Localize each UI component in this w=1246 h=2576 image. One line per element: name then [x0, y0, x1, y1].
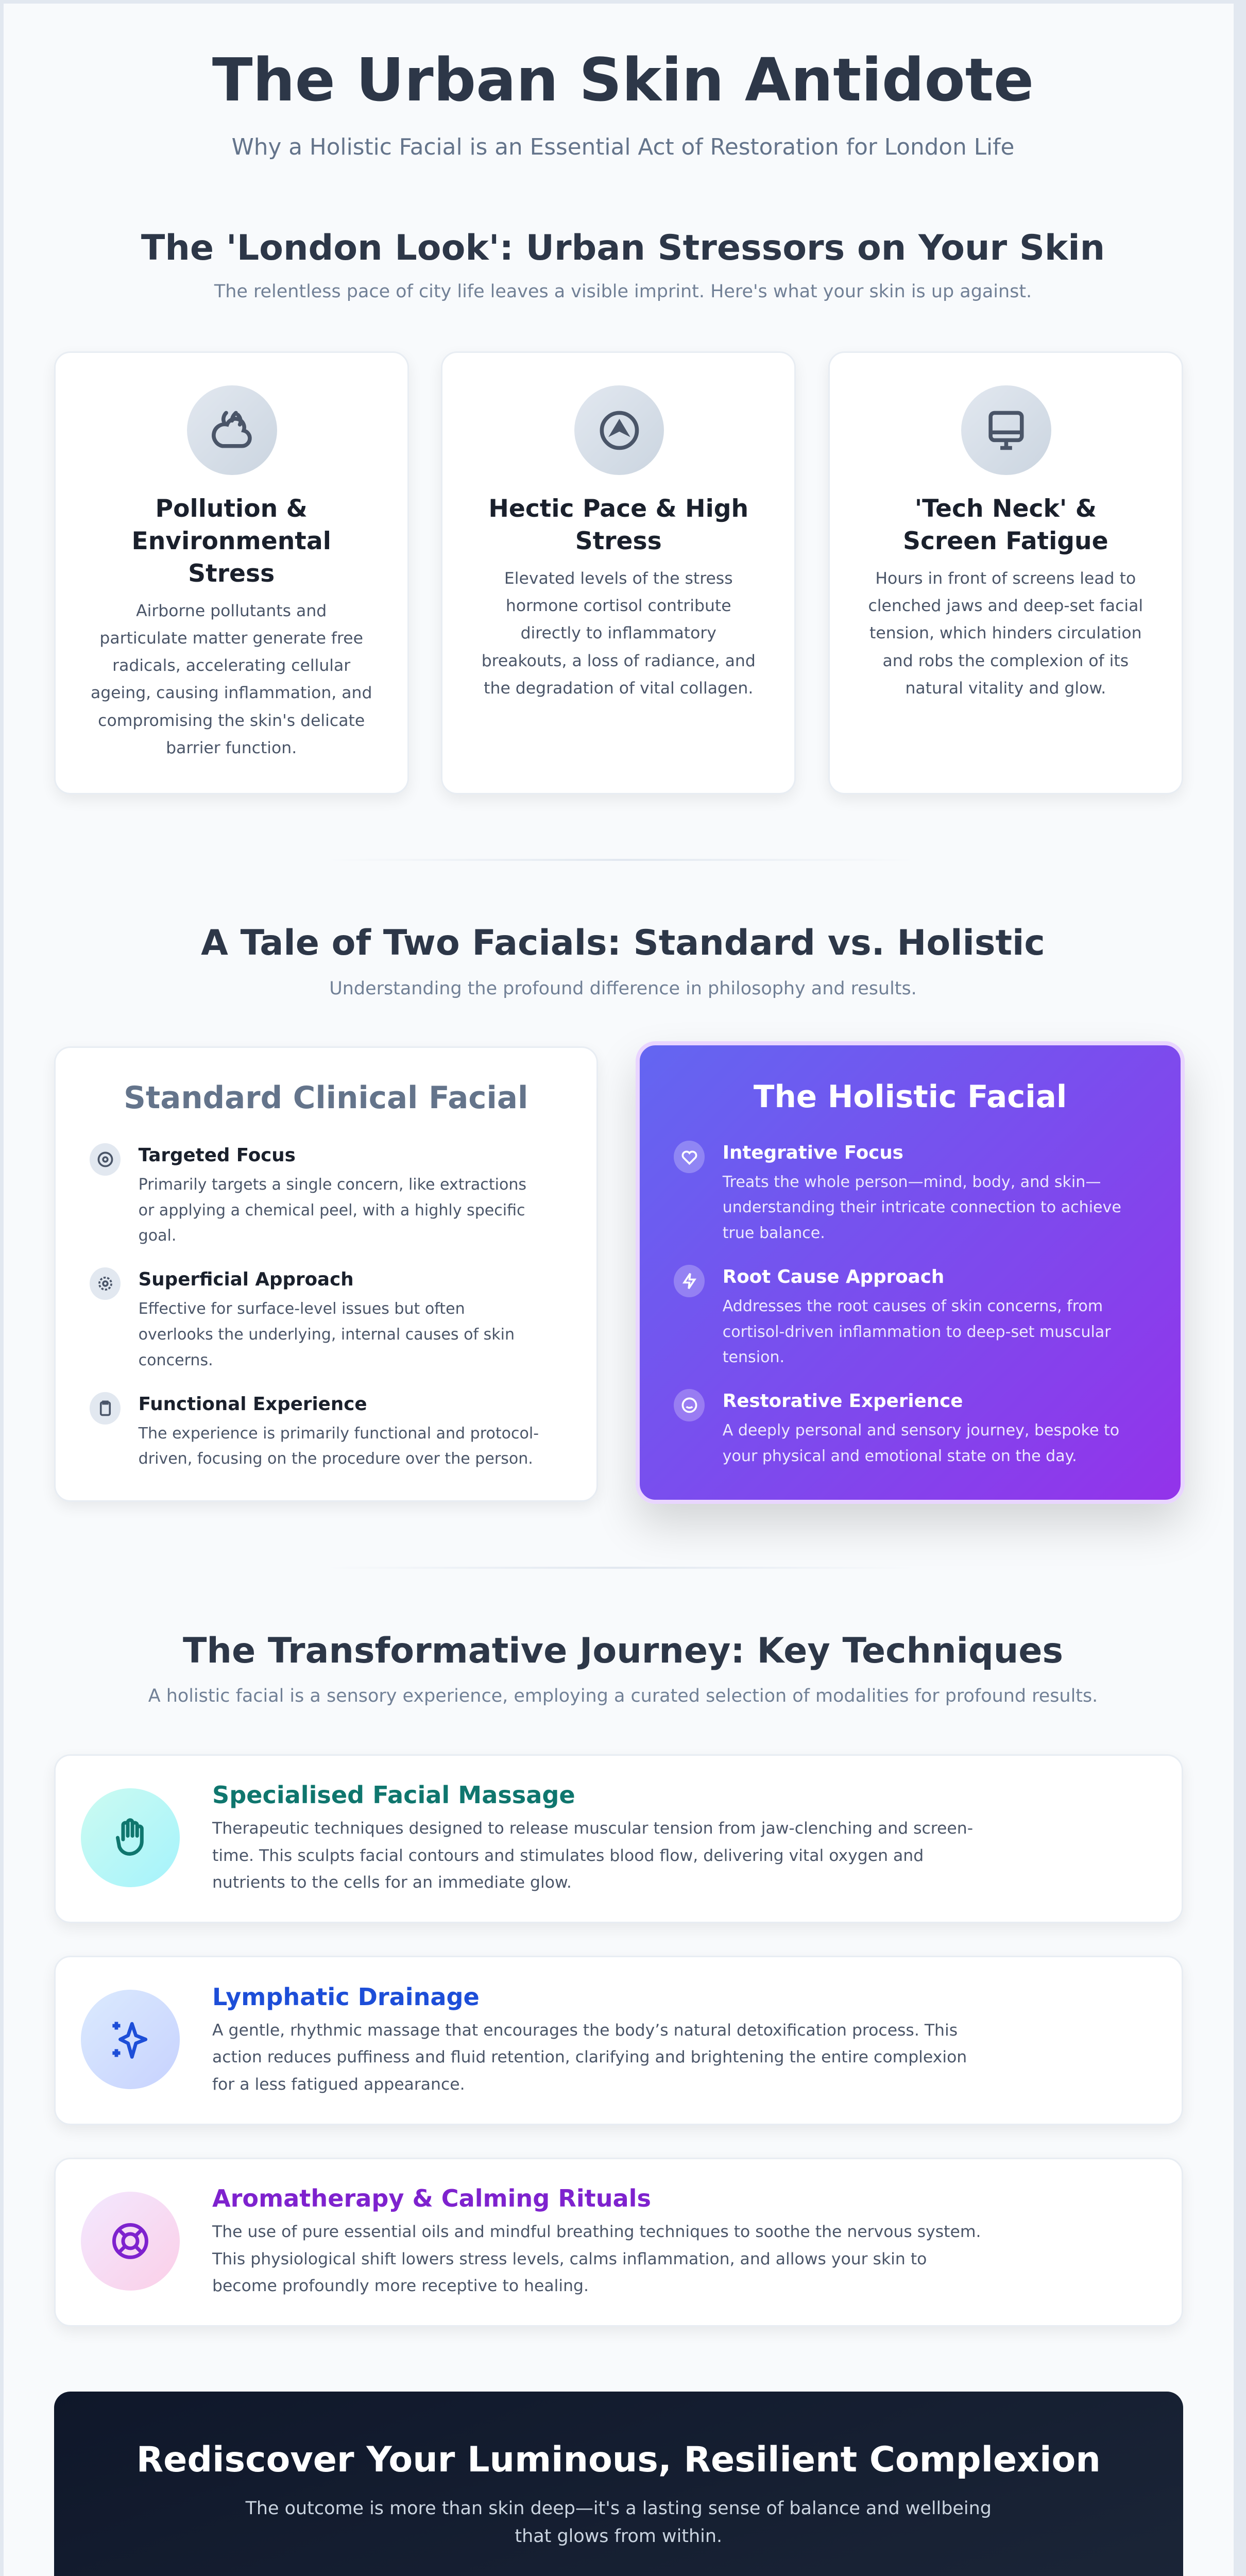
card: aromatherapy — [54, 2158, 1183, 2327]
item: root cause: Root Cause Approach — [723, 1266, 944, 1287]
heading: holistic: The Holistic Facial — [754, 1079, 1067, 1115]
item: functional experience: The experience is primarily functional and protocol-driven, focusing on the procedure over the person. — [139, 1425, 539, 1468]
title: Specialised Facial Massage — [212, 1781, 575, 1809]
icon: monitor — [961, 385, 1051, 475]
icon: gauge — [574, 385, 664, 475]
title: The Urban Skin Antidote — [212, 46, 1034, 115]
item: integrative focus: Treats the whole person—mind, body, and skin—understanding their intricate connection to achieve true balance. — [723, 1173, 1121, 1242]
card: pollution — [54, 351, 409, 794]
card body: Hectic Pace & High Stress — [488, 495, 748, 555]
subheading: journey: A holistic facial is a sensory experience, employing a curated selection of modalities for profound results. — [148, 1686, 1098, 1706]
subheading: two facials: Understanding the profound difference in philosophy and results. — [329, 978, 917, 999]
card: facial massage — [54, 1754, 1183, 1923]
item: superficial approach — [90, 1267, 515, 1369]
icon: cloud — [187, 385, 277, 475]
CTA heading: Rediscover Your Luminous, Resilient Complexion — [136, 2439, 1101, 2480]
card body: Hours in front of screens lead to clenched jaws and deep-set facial tension, which hinders circulation and robs the complexion of its natural vitality and glow. — [868, 569, 1143, 698]
heading: urban stressors: The 'London Look': Urban Stressors on Your Skin — [141, 228, 1105, 268]
panel: standard facial — [54, 1046, 598, 1502]
icon: lifebuoy — [81, 2192, 180, 2291]
item: restorative — [674, 1389, 1119, 1465]
item: integrative focus — [674, 1141, 1121, 1242]
panel: CTA — [54, 2392, 1183, 2576]
icon: clipboard — [90, 1392, 121, 1425]
card body — [868, 495, 1143, 698]
item: functional experience — [90, 1392, 539, 1468]
icon: eye — [90, 1143, 121, 1176]
card body: Airborne pollutants and particulate matter generate free radicals, accelerating cellular ageing, causing inflammation, and compromising the skin's delicate barrier function. — [91, 602, 372, 757]
icon: smile — [674, 1389, 705, 1421]
title: Aromatherapy & Calming Rituals — [212, 2184, 651, 2212]
item: superficial approach: Superficial Approach — [139, 1269, 354, 1290]
icon: heart — [674, 1141, 705, 1173]
item: restorative: A deeply personal and sensory journey, bespoke to your physical and emotional state on the day. — [723, 1421, 1119, 1465]
item: targeted focus — [90, 1143, 526, 1245]
icon: bolt — [674, 1265, 705, 1297]
item: targeted focus: Primarily targets a single concern, like extractions or applying a chemical peel, with a highly specific goal. — [139, 1176, 526, 1245]
heading: standard: Standard Clinical Facial — [124, 1080, 528, 1116]
text: The use of pure essential oils and mindful breathing techniques to soothe the nervous system. This physiological shift lowers stress levels, calms inflammation, and allows your skin to become profoundly more receptive to healing. — [212, 2223, 981, 2295]
text: Therapeutic techniques designed to release muscular tension from jaw-clenching and screen-time. This sculpts facial contours and stimulates blood flow, delivering vital oxygen and nutrients to the cells for an immediate glow. — [212, 1819, 973, 1892]
icon: gear — [90, 1267, 121, 1300]
card body: Elevated levels of the stress hormone cortisol contribute directly to inflammatory breakouts, a loss of radiance, and the degradation of vital collagen. — [482, 569, 756, 698]
card body: Pollution & Environmental Stress — [131, 495, 331, 588]
title: Lymphatic Drainage — [212, 1983, 480, 2011]
subheading: urban stressors: The relentless pace of city life leaves a visible imprint. Here's what your skin is up against. — [214, 281, 1032, 302]
panel: holistic facial — [636, 1041, 1185, 1504]
subtitle: Why a Holistic Facial is an Essential Act of Restoration for London Life — [232, 134, 1014, 160]
text: A gentle, rhythmic massage that encourages the body’s natural detoxification process. This action reduces puffiness and fluid retention, clarifying and brightening the entire complexion for a less fatigued appearance. — [212, 2021, 967, 2094]
card: stress — [441, 351, 796, 794]
CTA text: The outcome is more than skin deep—it's a lasting sense of balance and wellbeing that glows from within. — [246, 2498, 992, 2547]
card body — [91, 495, 372, 757]
heading: two facials: A Tale of Two Facials: Standard vs. Holistic — [201, 923, 1045, 963]
card body — [482, 495, 756, 698]
panel: stressor cards — [54, 351, 1183, 800]
item: integrative focus: Integrative Focus — [723, 1142, 903, 1163]
icon: hand — [81, 1788, 180, 1887]
item: functional experience: Functional Experience — [139, 1394, 367, 1415]
item: targeted focus: Targeted Focus — [139, 1145, 296, 1166]
card: tech neck — [828, 351, 1183, 794]
item: root cause — [674, 1265, 1111, 1366]
heading: journey: The Transformative Journey: Key Techniques — [183, 1631, 1063, 1671]
item: superficial approach: Effective for surface-level issues but often overlooks the underlying, internal causes of skin concerns. — [139, 1300, 515, 1369]
card: lymphatic drainage — [54, 1956, 1183, 2125]
icon: sparkle — [81, 1990, 180, 2089]
item: restorative: Restorative Experience — [723, 1391, 963, 1412]
item: root cause: Addresses the root causes of skin concerns, from cortisol-driven inflammation to deep-set muscular tension. — [723, 1297, 1111, 1366]
card body: 'Tech Neck' & Screen Fatigue — [903, 495, 1108, 555]
